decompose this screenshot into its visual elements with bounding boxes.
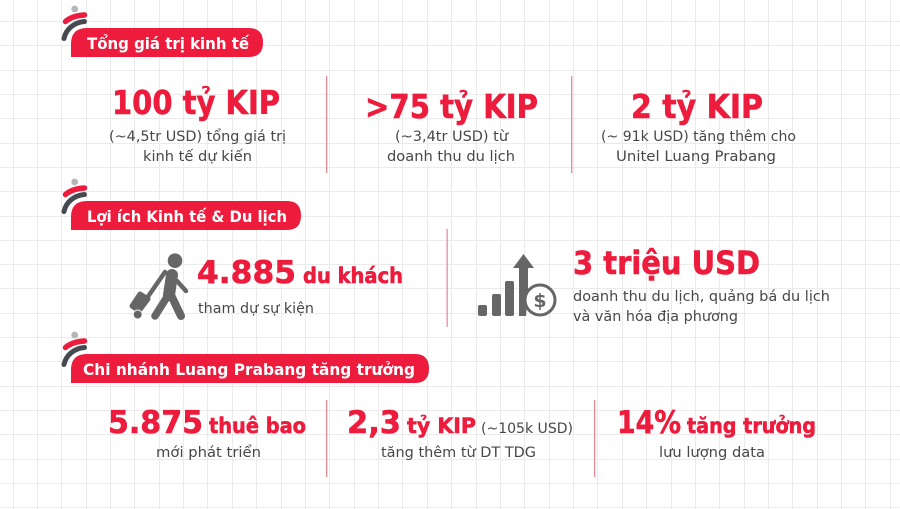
stat: 2,3 tỷ KIP: tăng thêm từ DT TDG (381, 445, 536, 461)
divider (594, 400, 595, 477)
stat: >75 tỷ KIP: doanh thu du lịch (387, 149, 515, 165)
stat: 14% tăng trưởng: tăng trưởng (687, 414, 816, 438)
stat: 100 tỷ KIP: (~4,5tr USD) tổng giá trị (109, 128, 286, 145)
stat: 2,3 tỷ KIP: (~105k USD) (481, 421, 573, 437)
section heading pill 2: Lợi ích Kinh tế & Du lịch (87, 207, 287, 226)
stat: 4.885 du khách: tham dự sự kiện (198, 301, 314, 317)
stat: 14% tăng trưởng (617, 405, 816, 461)
section logo 1 (64, 6, 84, 39)
stat: 5.875 thuê bao: thuê bao (209, 414, 306, 438)
stat: 3 triệu USD: và văn hóa địa phương (573, 309, 738, 325)
stat: 2,3 tỷ KIP: tỷ KIP (407, 414, 476, 438)
stat: >75 tỷ KIP: >75 tỷ KIP (365, 87, 538, 126)
divider (326, 76, 327, 173)
stat: 4.885 du khách (197, 255, 403, 317)
section heading pill 2 (71, 201, 301, 230)
stat: >75 tỷ KIP: (~3,4tr USD) từ (395, 129, 509, 145)
divider (326, 400, 327, 477)
section heading pill 1: Tổng giá trị kinh tế (87, 34, 250, 53)
stat: 4.885 du khách: du khách (303, 264, 403, 288)
stat: 100 tỷ KIP: 100 tỷ KIP (112, 83, 280, 122)
stat: 100 tỷ KIP: kinh tế dự kiến (143, 148, 252, 165)
icon: traveller with suitcase (132, 253, 186, 319)
stat: 2 tỷ KIP: Unitel Luang Prabang (616, 149, 776, 165)
section 1: Tổng giá trị kinh tế (64, 6, 796, 173)
stat: >75 tỷ KIP (365, 87, 538, 165)
divider (571, 76, 572, 173)
section 3: Chi nhánh Luang Prabang tăng trưởng (64, 332, 816, 477)
stat: 3 triệu USD: doanh thu du lịch, quảng bá du lịch (573, 289, 830, 305)
stat: 2 tỷ KIP: 2 tỷ KIP (631, 87, 763, 126)
section heading pill 3: Chi nhánh Luang Prabang tăng trưởng (83, 360, 415, 379)
stat: 4.885 du khách: 4.885 (197, 255, 296, 291)
stat: 2 tỷ KIP: (~ 91k USD) tăng thêm cho (601, 129, 796, 145)
stat: 5.875 thuê bao: 5.875 (108, 405, 203, 441)
stat: 14% tăng trưởng: 14% (617, 405, 681, 441)
section heading pill 1 (71, 28, 263, 57)
stat: 2,3 tỷ KIP (347, 405, 573, 461)
section 2: Lợi ích Kinh tế & Du lịch (64, 179, 830, 327)
section heading pill 3 (71, 354, 429, 383)
stat: 2 tỷ KIP (601, 87, 796, 165)
icon: growth bars and dollar coin (478, 254, 555, 316)
stat: 14% tăng trưởng: lưu lượng data (659, 445, 765, 461)
stat: 5.875 thuê bao (108, 405, 306, 461)
stat: 3 triệu USD: 3 triệu USD (573, 244, 760, 282)
section logo 2 (64, 179, 84, 212)
stat: 5.875 thuê bao: mới phát triển (156, 444, 261, 461)
stat: 100 tỷ KIP (109, 83, 286, 165)
divider (446, 229, 448, 327)
stat: 2,3 tỷ KIP: 2,3 (347, 405, 401, 441)
stat: 3 triệu USD (573, 244, 830, 325)
section logo 3 (64, 332, 84, 364)
icon: growth bars and dollar coin: $ (533, 290, 547, 312)
